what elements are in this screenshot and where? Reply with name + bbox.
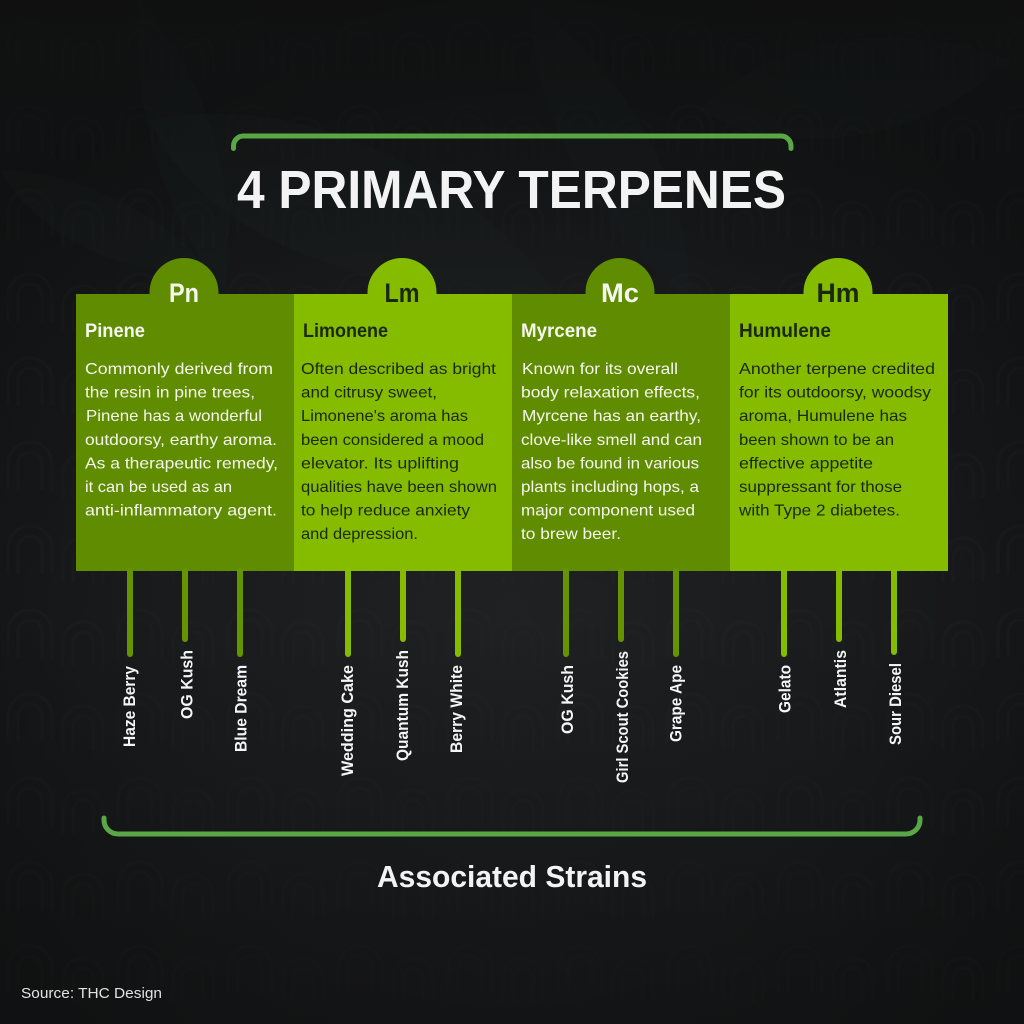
Limonene heading: Limonene	[303, 321, 388, 342]
Humulene heading: Humulene	[739, 321, 831, 342]
strain labels	[120, 650, 905, 783]
Pinene description	[85, 361, 278, 520]
Pinene tab and card	[76, 258, 294, 571]
strain labels: Grape Ape	[666, 665, 686, 742]
Pinene heading: Pinene	[85, 321, 145, 342]
Limonene description: elevator. Its uplifting	[301, 455, 459, 472]
Limonene description: Often described as bright	[301, 361, 497, 378]
strain labels: Girl Scout Cookies	[613, 651, 632, 783]
Limonene description: qualities have been shown	[301, 479, 497, 496]
bottom bracket	[104, 818, 920, 834]
Pinene description: the resin in pine trees,	[85, 385, 255, 402]
strain labels: Quantum Kush	[393, 650, 412, 761]
Myrcene description	[521, 361, 702, 543]
Limonene tab and card	[294, 258, 512, 571]
title: 4 PRIMARY TERPENES	[237, 160, 786, 220]
Myrcene heading: Myrcene	[521, 321, 597, 342]
Pinene description: Commonly derived from	[85, 361, 273, 378]
strain labels: Blue Dream	[232, 665, 250, 752]
panel: Humulene	[730, 258, 948, 571]
strain labels: Sour Diesel	[886, 663, 905, 745]
Humulene tab and card	[730, 258, 948, 571]
Myrcene description: major component used	[521, 503, 695, 520]
Humulene description: aroma, Humulene has	[739, 408, 907, 425]
Humulene description: for its outdoorsy, woodsy	[739, 385, 931, 402]
Humulene description: Another terpene credited	[739, 361, 935, 378]
Humulene symbol: Hm	[816, 278, 860, 308]
Humulene description: with Type 2 diabetes.	[738, 503, 900, 520]
Myrcene tab and card	[512, 258, 730, 571]
associated strains caption: Associated Strains	[377, 859, 647, 894]
Myrcene description: body relaxation effects,	[521, 385, 700, 402]
Myrcene strain connectors	[566, 571, 676, 654]
panel: Myrcene	[512, 258, 730, 571]
strain labels: Gelato	[776, 665, 794, 713]
Limonene description: Limonene's aroma has	[301, 408, 468, 425]
Pinene description: outdoorsy, earthy aroma.	[85, 432, 277, 449]
Myrcene description: plants including hops, a	[521, 479, 699, 496]
Pinene description: anti-inflammatory agent.	[85, 503, 277, 520]
strain labels: Wedding Cake	[338, 665, 357, 776]
Pinene description: As a therapeutic remedy,	[85, 455, 278, 472]
Humulene description: suppressant for those	[739, 479, 902, 496]
Myrcene description: to brew beer.	[521, 526, 621, 543]
Pinene symbol: Pn	[169, 278, 199, 308]
strain labels: Berry White	[447, 665, 466, 753]
strain labels: Haze Berry	[120, 666, 139, 747]
Humulene strain connectors	[784, 571, 894, 654]
Humulene description: been shown to be an	[739, 432, 894, 449]
strain labels: OG Kush	[558, 665, 577, 734]
Limonene description: and citrusy sweet,	[301, 385, 437, 402]
Limonene symbol: Lm	[384, 278, 420, 308]
Humulene description	[738, 361, 935, 520]
Limonene description	[301, 361, 497, 543]
source note: Source: THC Design	[21, 986, 162, 1002]
Myrcene description: also be found in various	[521, 455, 699, 472]
Pinene description: Pinene has a wonderful	[86, 408, 262, 425]
top bracket	[234, 136, 791, 148]
Pinene description: it can be used as an	[85, 479, 232, 496]
strain labels: OG Kush	[178, 650, 196, 719]
Myrcene description: Myrcene has an earthy,	[522, 408, 701, 425]
Limonene description: to help reduce anxiety	[301, 503, 470, 520]
Humulene description: effective appetite	[739, 455, 873, 472]
Limonene strain connectors	[348, 571, 458, 654]
Limonene description: been considered a mood	[301, 432, 484, 449]
panel: Pinene	[76, 258, 294, 571]
panel: Limonene	[294, 258, 512, 571]
Myrcene description: clove-like smell and can	[521, 432, 702, 449]
Myrcene symbol: Mc	[601, 278, 639, 308]
Limonene description: and depression.	[301, 526, 418, 543]
strain labels: Atlantis	[831, 650, 850, 708]
Myrcene description: Known for its overall	[522, 361, 678, 378]
Pinene strain connectors	[130, 571, 240, 654]
